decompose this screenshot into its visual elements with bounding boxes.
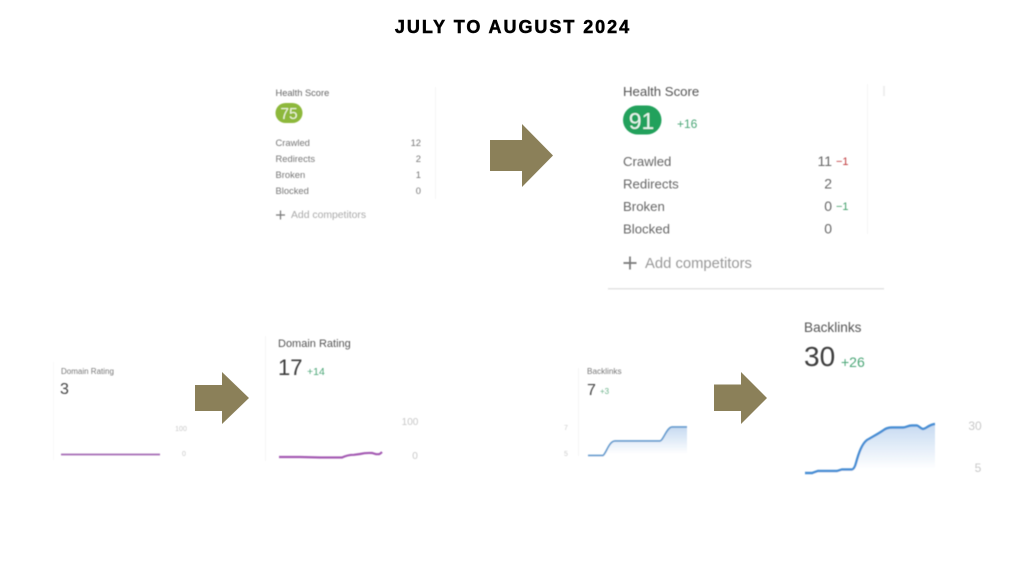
title: JULY TO AUGUST 2024 (395, 17, 631, 37)
line chart: domain rating after (279, 452, 382, 458)
metrics table after: Crawled (623, 154, 671, 169)
axis labels: backlinks after: 5 (975, 461, 982, 475)
metrics table before: Broken (276, 169, 305, 180)
add competitors after: Add competitors (645, 256, 752, 272)
metrics table before: 2 (416, 153, 421, 164)
badge: score 91: 91 (629, 108, 654, 134)
heading: backlinks before: Backlinks (587, 367, 622, 376)
heading: backlinks after: Backlinks (804, 320, 862, 335)
axis labels: backlinks before: 7 (564, 425, 568, 432)
change: +16: +16 (677, 117, 698, 131)
metrics table before: Redirects (276, 153, 315, 164)
axis labels: domain rating after: 0 (412, 451, 418, 462)
metrics table after: 2 (824, 176, 832, 192)
area chart: backlinks after (805, 424, 935, 474)
metrics table after: 0 (824, 198, 832, 214)
panel: health score after (608, 84, 885, 290)
metrics table before: 0 (416, 185, 421, 196)
metrics table after: −1 (836, 201, 849, 213)
axis labels: backlinks after: 30 (968, 419, 982, 433)
panel: domain rating after (265, 336, 419, 462)
metrics table after: 11 (817, 153, 832, 169)
heading: health score before: Health Score (276, 88, 329, 98)
area chart: backlinks before (588, 427, 687, 457)
axis labels: domain rating after (402, 417, 419, 462)
metrics table after: −1 (836, 156, 849, 168)
value: 3: 3 (60, 381, 69, 398)
panel: backlinks after (804, 320, 982, 475)
metrics table before: Crawled (276, 137, 310, 148)
badge: score 75 (276, 103, 302, 123)
metrics table before (276, 137, 421, 196)
badge: score 91 (623, 106, 662, 134)
add competitors before: Add competitors (291, 210, 366, 221)
axis labels: domain rating before: 100 (175, 426, 187, 433)
arrow: domain rating (195, 372, 249, 424)
axis labels: backlinks before: 5 (564, 451, 568, 458)
arrow: backlinks (714, 372, 767, 424)
metrics table before: 1 (416, 169, 421, 180)
change: +26: +26 (841, 354, 865, 370)
axis labels: domain rating before (175, 426, 187, 458)
metrics table after: Redirects (623, 176, 679, 192)
metrics table before: 12 (411, 137, 421, 148)
metrics table after (623, 153, 849, 236)
axis labels: backlinks after (968, 419, 982, 475)
change: +3: +3 (600, 387, 610, 396)
metrics table after: 0 (824, 220, 832, 236)
metrics table before: Blocked (276, 185, 309, 196)
metrics table after: Broken (623, 199, 665, 214)
panel: health score before (276, 87, 436, 221)
heading: health score after: Health Score (623, 84, 699, 99)
value: 17: 17 (278, 355, 302, 380)
badge: score 75: 75 (280, 106, 298, 123)
value: 7: 7 (587, 382, 596, 399)
panel: domain rating before (53, 362, 187, 460)
heading: domain rating after: Domain Rating (278, 338, 351, 350)
value: 30: 30 (804, 341, 835, 372)
panel: backlinks before (564, 367, 687, 458)
line chart: domain rating before (61, 454, 160, 456)
heading: domain rating before: Domain Rating (61, 367, 114, 376)
metrics table after: Blocked (623, 222, 670, 236)
axis labels: domain rating before: 0 (182, 451, 186, 458)
change: +14: +14 (307, 366, 325, 378)
axis labels: backlinks before (564, 425, 568, 458)
axis labels: domain rating after: 100 (402, 417, 419, 428)
arrow: health score (490, 124, 553, 187)
